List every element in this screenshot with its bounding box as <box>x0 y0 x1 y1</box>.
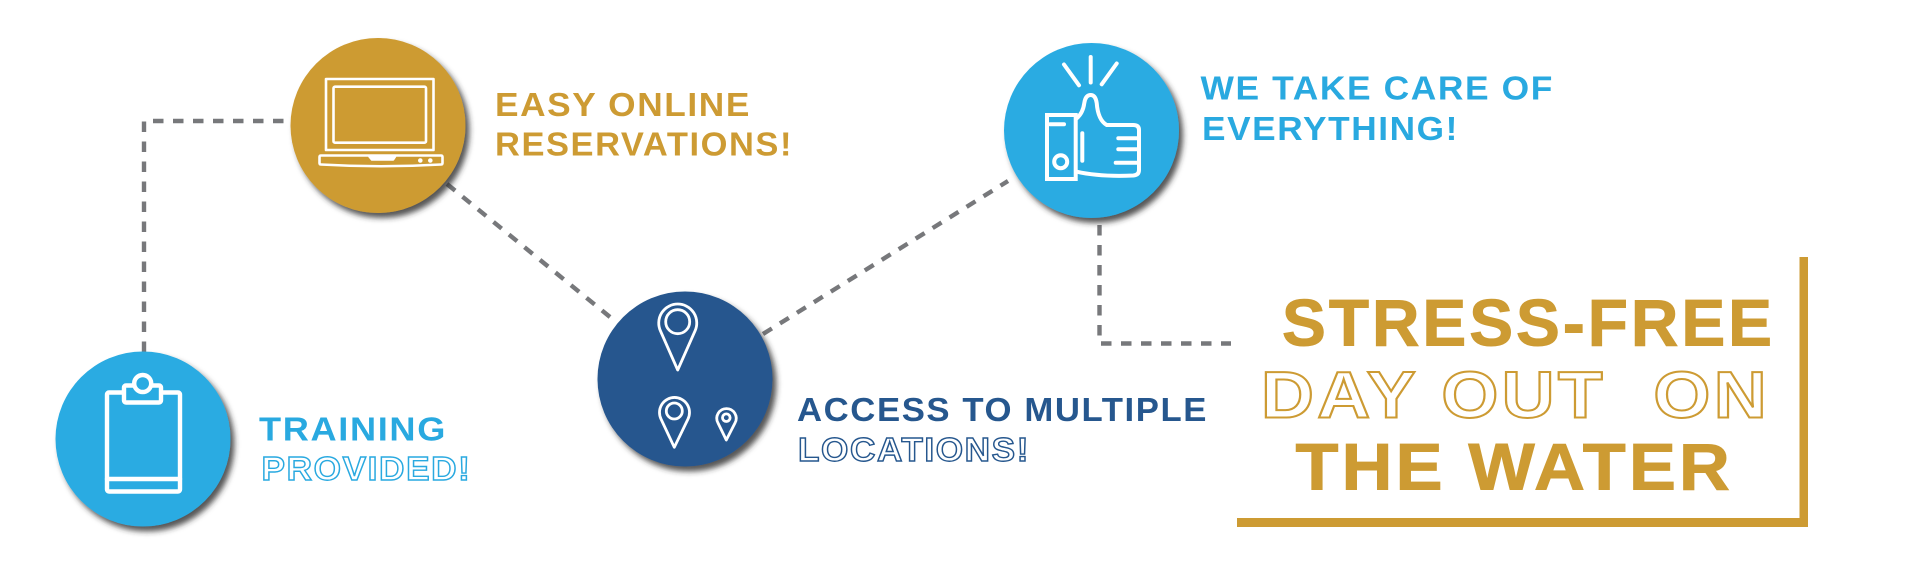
icon: map pins <box>659 304 736 447</box>
text: we take care of everything: WE TAKE CARE OF <box>1200 70 1554 106</box>
text: access to multiple locations: LOCATIONS! <box>798 431 1030 468</box>
icon: laptop <box>320 79 442 166</box>
circle: care <box>1004 43 1179 218</box>
heading: the water: THE WATER <box>1296 430 1733 504</box>
icon: clipboard <box>107 375 180 492</box>
step: training provided <box>56 352 472 526</box>
circle: locations <box>598 292 772 466</box>
circle: reservations <box>290 38 466 213</box>
callout: stress-free day out on the water <box>1237 257 1808 527</box>
text: easy online reservations: RESERVATIONS! <box>495 126 793 162</box>
icon: thumbs up <box>1047 57 1139 179</box>
heading: stress-free: STRESS-FREE <box>1282 286 1775 360</box>
text: access to multiple locations: ACCESS TO MULTIPLE <box>797 391 1208 428</box>
circle: training <box>56 352 230 526</box>
heading: day out on: DAY OUT ON <box>1261 358 1770 432</box>
step: easy online reservations <box>290 38 793 213</box>
bracket frame <box>1237 257 1808 527</box>
text: easy online reservations: EASY ONLINE <box>495 86 751 123</box>
text: training provided <box>259 410 472 487</box>
step: we take care of everything <box>1004 43 1554 218</box>
dashed connector: training to reservations <box>144 121 291 352</box>
text: training provided: TRAINING <box>259 410 447 448</box>
dashed connector: reservations to locations <box>447 184 610 317</box>
text: we take care of everything <box>1200 70 1554 147</box>
dashed connector: care to stress-free <box>1100 225 1231 344</box>
step: access to multiple locations <box>598 292 1208 468</box>
text: we take care of everything: EVERYTHING! <box>1202 110 1459 147</box>
dashed connector: locations to care <box>763 181 1008 334</box>
text: access to multiple locations <box>797 391 1208 468</box>
text: easy online reservations <box>495 86 793 162</box>
text: training provided: PROVIDED! <box>262 450 472 487</box>
